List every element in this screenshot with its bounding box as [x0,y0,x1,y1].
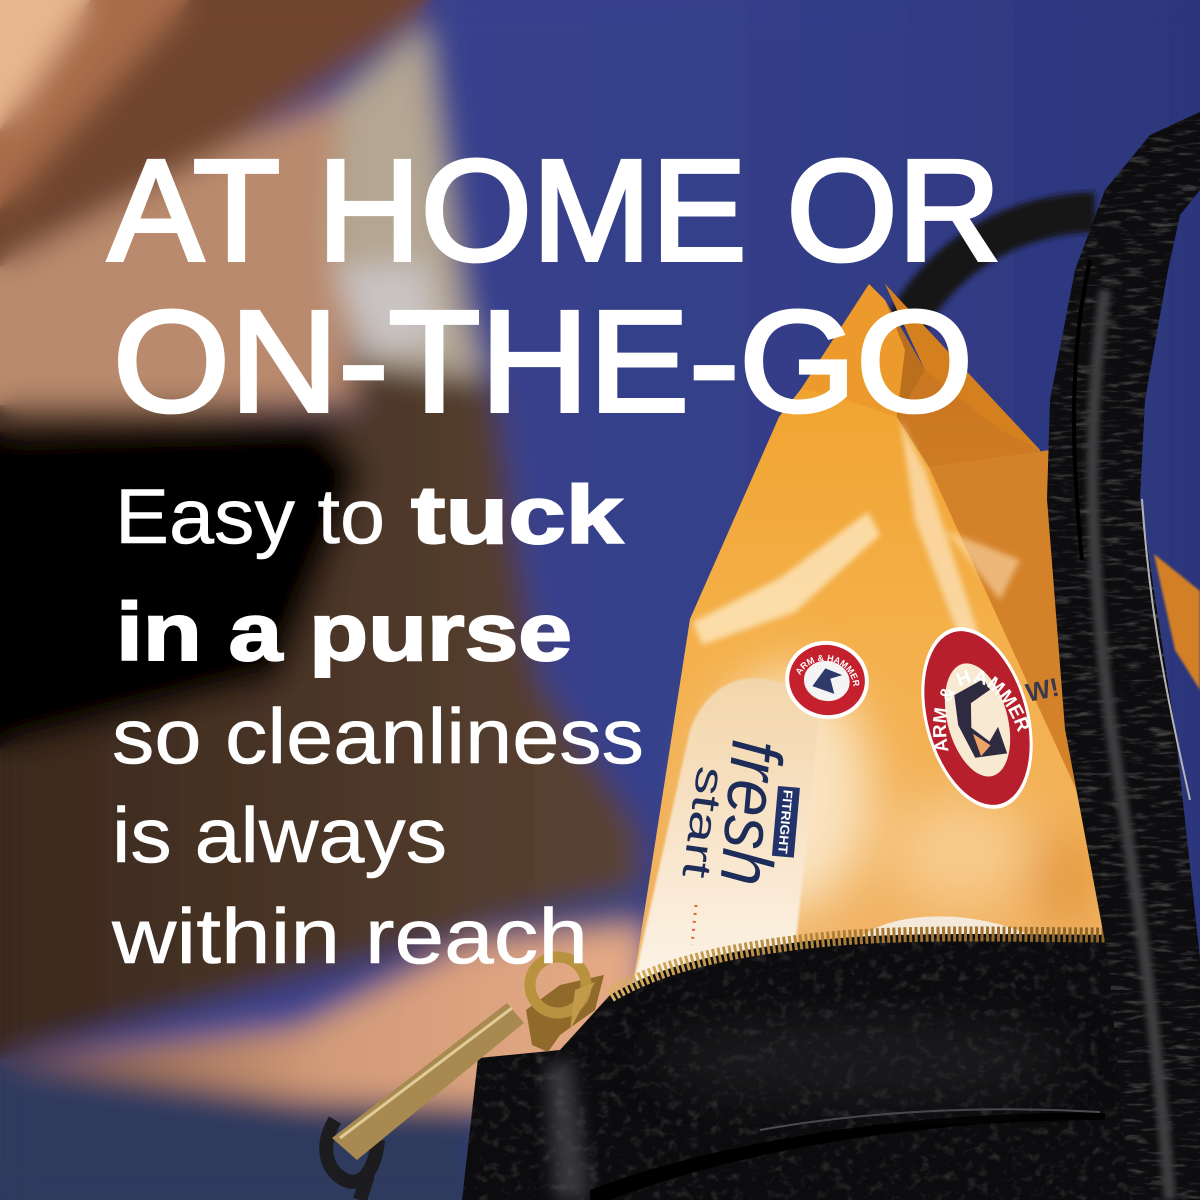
purse lit leather [650,1020,1070,1100]
purse crease [590,1113,1105,1200]
body text: is always [112,791,447,879]
orange product dots [692,905,696,945]
body text: so cleanliness [112,692,644,780]
wipes package [632,284,1102,984]
gold zipper pull [326,957,604,1200]
black purse body [462,934,1160,1200]
far orange package corner [1154,554,1200,690]
back panel [885,284,1112,930]
crimped top seal [885,284,1040,450]
purse crease highlight [760,1109,1100,1130]
body text: Easy to [115,472,385,560]
new badge text: W! [1023,672,1062,708]
back lower panel [929,450,1112,930]
body text [111,470,644,980]
ring [530,957,586,1013]
gold strip [332,1003,524,1160]
large brand seal [921,627,1033,809]
handle edge highlight [1142,499,1190,800]
small brand seal [785,640,869,720]
white label panel [633,678,818,985]
title [108,130,1001,442]
front crimped seal [801,284,925,417]
body text: within reach [111,892,588,980]
seal shadow [885,300,925,417]
soft glow behind seals [710,670,1093,930]
slider body [526,975,604,1052]
back strap of the bag handle [905,212,1095,325]
slider shine [570,982,595,1030]
handle seam [1074,260,1090,560]
brand badge: FITRIGHT [775,789,796,854]
front bag handle [1047,112,1200,1200]
front panel [633,350,1116,985]
title: AT HOME OR [108,130,1001,291]
body text: in a purse [116,587,572,678]
zipper [610,934,1118,995]
product name: start: start [674,764,733,881]
inner white bulge [860,916,1030,938]
small brand seal: ARM & HAMMER [796,654,860,687]
body text: tuck [411,470,623,561]
title: ON-THE-GO [113,281,973,442]
purse corner highlight [545,1060,590,1200]
glossy highlights [693,420,1020,705]
brand badge [772,786,800,858]
large brand seal: ARM & HAMMER [933,670,1028,751]
strip highlight [340,1008,512,1138]
product name: fresh: fresh [704,737,797,889]
handle sheen [1092,290,1170,1200]
dark pull loop [326,1120,378,1200]
